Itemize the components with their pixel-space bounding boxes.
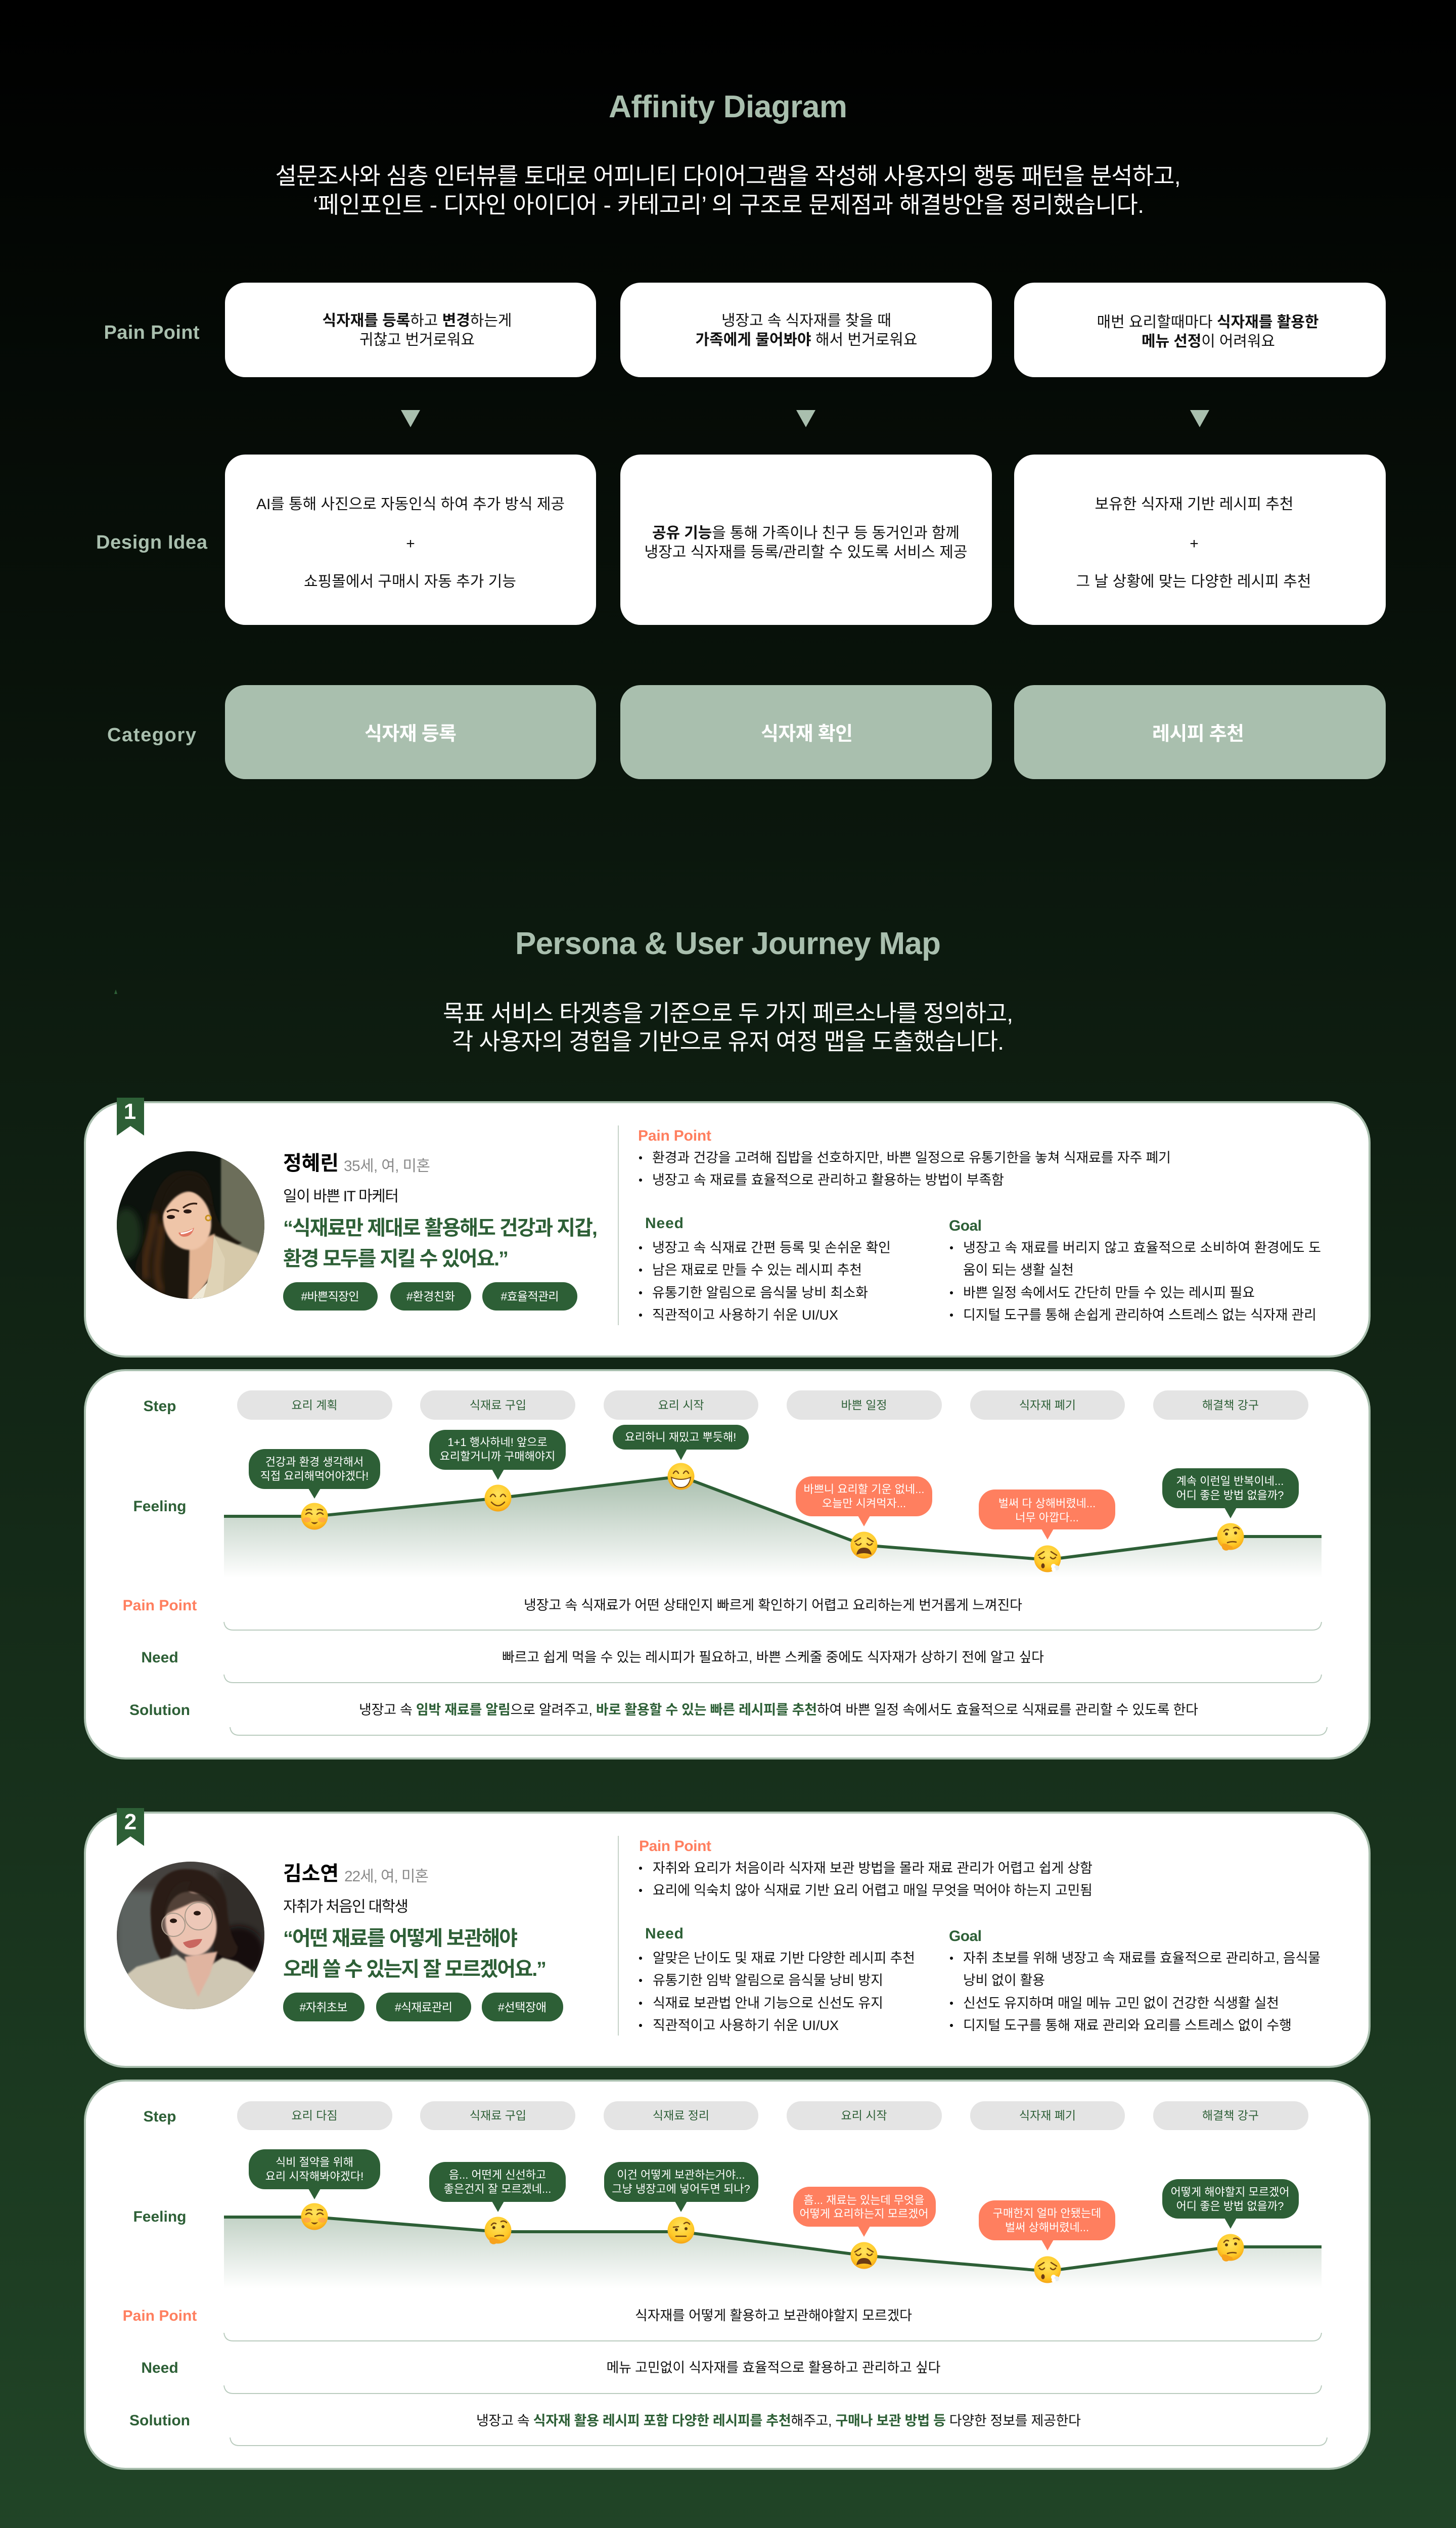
callout: step 4: 바쁘니 요리할 기운 없네... (803, 1483, 925, 1496)
callout: step 6 (1162, 2179, 1299, 2229)
callout: step 6: 계속 이런일 반복이네... (1176, 1475, 1284, 1487)
text: persona 2 name: 김소연 (283, 1863, 339, 1885)
callout: step 5: 너무 아깝다... (1015, 1511, 1079, 1524)
steps row: 식재료 구입 (470, 2109, 526, 2122)
row: pain point (224, 2308, 1322, 2341)
row label: Pain Point: Pain Point (104, 322, 200, 343)
text: persona 2 goals: 신선도 유지하며 매일 메뉴 고민 없이 건강한 식생활 실천 (963, 1996, 1279, 2011)
callout: step 1: 건강과 환경 생각해서 (265, 1456, 363, 1468)
text: persona 2 goals: 낭비 없이 활용 (963, 1973, 1045, 1988)
text: persona 2 needs: Need (645, 1925, 684, 1942)
chart: feeling curve 1 (224, 1476, 1322, 1578)
text: persona 1 needs: 직관적이고 사용하기 쉬운 UI/UX (652, 1307, 838, 1323)
design idea card 2 (620, 455, 992, 625)
text: persona 2 needs: 유통기한 임박 알림으로 음식물 낭비 방지 (653, 1973, 883, 1988)
category card 1 (225, 685, 596, 779)
text: persona 1 goals: Goal (949, 1217, 982, 1234)
text: persona 2 goals: 자취 초보를 위해 냉장고 속 재료를 효율적으로 관리하고, 음식물 (963, 1951, 1321, 1966)
row: solution (230, 1702, 1327, 1735)
icon: smiling emoji (484, 1484, 512, 1512)
category card 1: 식자재 등록 (365, 724, 457, 745)
icon: ribbon number 1 (117, 1098, 144, 1136)
labels: journey rows: Solution (129, 2412, 190, 2429)
design idea card 1: 쇼핑몰에서 구매시 자동 추가 기능 (304, 573, 516, 590)
callout: step 5: 구매한지 얼마 안됐는데 (993, 2207, 1101, 2220)
arrow: column 3 (1190, 410, 1209, 427)
text: persona 1 pain points (638, 1127, 1171, 1188)
pain point card 2: 냉장고 속 식자재를 찾을 때 (721, 312, 891, 329)
text: persona 1 quote: 환경 모두를 지킬 수 있어요.” (283, 1248, 509, 1270)
tag: 바쁜직장인 (283, 1282, 378, 1311)
text: persona 1 needs: Need (645, 1215, 684, 1232)
callout: step 2: 좋은건지 잘 모르겠네... (444, 2183, 551, 2195)
pain point card 1: 식자재를 등록하고 변경하는게 (323, 312, 512, 329)
panel: persona 2 (85, 1808, 1370, 2067)
panel: journey map 1 (85, 1370, 1370, 1758)
pain point card 2: 가족에게 물어봐야 해서 번거로워요 (696, 332, 917, 348)
steps row: 요리 다짐 (291, 2109, 338, 2122)
design idea card 1: + (406, 535, 415, 552)
text: persona 2 needs: 직관적이고 사용하기 쉬운 UI/UX (653, 2018, 839, 2033)
tag: 효율적관리 (482, 1282, 577, 1311)
steps row: 바쁜 일정 (841, 1398, 887, 1412)
labels: journey rows: Need (141, 2360, 178, 2376)
text: persona 2 goals: 디지털 도구를 통해 재료 관리와 요리를 스트레스 없이 수행 (963, 2018, 1292, 2033)
text block: persona intro: 각 사용자의 경험을 기반으로 유저 여정 맵을 도출했습니다. (452, 1028, 1004, 1055)
text: persona 2 name (283, 1863, 429, 1885)
heading: Persona and User Journey Map: Persona & User Journey Map (515, 926, 941, 961)
text: persona 1 needs: 유통기한 알림으로 음식물 낭비 최소화 (652, 1285, 868, 1300)
steps row: 식자재 폐기 (1019, 1398, 1076, 1412)
design idea card 3: 그 날 상황에 맞는 다양한 레시피 추천 (1076, 573, 1311, 590)
tag: 식재료관리: #식재료관리 (395, 2001, 452, 2014)
tag: 환경친화: #환경친화 (406, 1290, 455, 1303)
callout: step 3: 이건 어떻게 보관하는거야... (617, 2169, 745, 2181)
text: persona 1 name: 35세, 여, 미혼 (344, 1158, 430, 1175)
icon: relaxed emoji (301, 1503, 328, 1530)
icon: thinking emoji (1217, 2234, 1244, 2262)
callout: step 3 (604, 2162, 758, 2212)
labels: journey rows: Step (143, 1398, 176, 1415)
steps row: 해결책 강구 (1202, 1398, 1259, 1412)
row: pain point (224, 1598, 1322, 1630)
text: persona 2 needs (639, 1925, 915, 2033)
callout: step 4 (793, 2187, 936, 2237)
category card 3 (1014, 685, 1386, 779)
callout: step 5 (979, 1489, 1115, 1540)
text: persona 1 pain points: 환경과 건강을 고려해 집밥을 선호하지만, 바쁜 일정으로 유통기한을 놓쳐 식재료를 자주 폐기 (652, 1150, 1171, 1165)
icon: relaxed emoji (301, 2203, 328, 2230)
labels: journey rows: Need (141, 1649, 178, 1666)
icon: raised eyebrow emoji (667, 2217, 695, 2244)
text: persona 2 needs: 알맞은 난이도 및 재료 기반 다양한 레시피 추천 (653, 1951, 915, 1966)
text: persona 2 quote: 오래 쓸 수 있는지 잘 모르겠어요.” (283, 1958, 547, 1980)
tag: 자취초보: #자취초보 (299, 2001, 348, 2014)
callout: step 1: 식비 절약을 위해 (276, 2156, 353, 2169)
row: solution: 냉장고 속 식자재 활용 레시피 포함 다양한 레시피를 추천해주고, 구매나 보관 방법 등 다양한 정보를 제공한다 (476, 2413, 1081, 2428)
text: persona 2 name: 22세, 여, 미혼 (344, 1868, 429, 1885)
text: persona 1 name: 정혜린 (283, 1152, 339, 1175)
design idea card 3 (1014, 455, 1386, 625)
text: persona 1 role: 일이 바쁜 IT 마케터 (283, 1188, 399, 1205)
row: need (224, 1650, 1322, 1683)
text: persona 2 pain points: 요리에 익숙치 않아 식재료 기반 요리 어렵고 매일 무엇을 먹어야 하는지 고민됨 (653, 1883, 1093, 1898)
text: persona 2 goals (949, 1928, 1321, 2033)
labels: journey rows: Feeling (133, 2208, 187, 2225)
tag: 식재료관리 (376, 1993, 471, 2021)
callout: step 2: 음... 어떤게 신선하고 (449, 2169, 546, 2181)
design idea card 3: 보유한 식자재 기반 레시피 추천 (1095, 496, 1293, 513)
steps row: 식자재 폐기 (1019, 2109, 1076, 2122)
callout: step 2 (429, 2162, 566, 2212)
category card 3: 레시피 추천 (1152, 724, 1244, 745)
text: persona 1 goals: 디지털 도구를 통해 손쉽게 관리하여 스트레스 없는 식자재 관리 (963, 1307, 1316, 1323)
tag: 바쁜직장인: #바쁜직장인 (301, 1290, 359, 1303)
design idea card 3: + (1190, 535, 1199, 552)
labels: journey rows: Feeling (133, 1498, 187, 1515)
text: persona 2 pain points: 자취와 요리가 처음이라 식자재 보관 방법을 몰라 재료 관리가 어렵고 쉽게 상함 (653, 1861, 1093, 1876)
text: persona 2 goals: Goal (949, 1928, 982, 1945)
pain point card 3: 매번 요리할때마다 식자재를 활용한 (1097, 314, 1318, 331)
text: persona 2 role: 자취가 처음인 대학생 (283, 1899, 408, 1915)
callout: step 5: 벌써 다 상해버렸네... (998, 1497, 1096, 1510)
row: solution: 냉장고 속 임박 재료를 알림으로 알려주고, 바로 활용할 수 있는 빠른 레시피를 추천하여 바쁜 일정 속에서도 효율적으로 식재료를 관리할 수 있도록 한다 (359, 1702, 1198, 1718)
tag: 자취초보 (283, 1993, 365, 2021)
text block: affinity intro (275, 163, 1181, 218)
text: persona 1 name (283, 1152, 430, 1175)
design idea card 1 (225, 455, 596, 625)
arrow: column 2 (796, 410, 815, 427)
callout: step 5: 벌써 상해버렸네... (1005, 2221, 1089, 2234)
row: need: 빠르고 쉽게 먹을 수 있는 레시피가 필요하고, 바쁜 스케줄 중에도 식자재가 상하기 전에 알고 싶다 (502, 1650, 1044, 1665)
labels: journey rows: Pain Point (123, 2308, 197, 2324)
labels: journey rows: Solution (129, 1702, 190, 1719)
text block: affinity intro: ‘페인포인트 - 디자인 아이디어 - 카테고리’ 의 구조로 문제점과 해결방안을 정리했습니다. (313, 192, 1144, 218)
pain point card 1: 귀찮고 번거로워요 (359, 332, 475, 348)
panel: persona 1 (85, 1098, 1370, 1357)
icon: ribbon number 2: 2 (124, 1810, 136, 1834)
labels: journey rows (123, 1398, 197, 1719)
design idea card 2: 공유 기능을 통해 가족이나 친구 등 동거인과 함께 (652, 525, 960, 541)
steps row (237, 2101, 1308, 2130)
callout: step 2: 요리할거니까 구매해야지 (440, 1450, 555, 1463)
row: pain point: 냉장고 속 식재료가 어떤 상태인지 빠르게 확인하기 어렵고 요리하는게 번거롭게 느껴진다 (524, 1598, 1022, 1613)
callout: step 1 (249, 2149, 380, 2199)
icon: ribbon number 2 (117, 1808, 144, 1846)
steps row: 식재료 구입 (470, 1398, 526, 1412)
callout: step 1 (249, 1449, 380, 1499)
row: solution (230, 2413, 1327, 2446)
text: persona 1 needs: 남은 재료로 만들 수 있는 레시피 추천 (652, 1262, 862, 1278)
callout: step 3 (613, 1425, 749, 1460)
icon: exhaling emoji (1034, 1545, 1061, 1572)
callout: step 6: 어떻게 해야할지 모르겠어 (1171, 2186, 1289, 2198)
text: persona 1 needs: 냉장고 속 식재료 간편 등록 및 손쉬운 확인 (652, 1240, 891, 1255)
pain point card 1 (225, 283, 596, 377)
callout: step 3: 요리하니 재밌고 뿌듯해! (625, 1431, 736, 1443)
text: persona 2 quote: “어떤 재료를 어떻게 보관해야 (283, 1927, 518, 1950)
callout: step 2: 1+1 행사하네! 앞으로 (447, 1436, 548, 1449)
text: persona 1 goals (949, 1217, 1321, 1323)
text: persona 1 quote: “식재료만 제대로 활용해도 건강과 지갑, (283, 1217, 598, 1239)
tag: 선택장애: #선택장애 (498, 2001, 547, 2014)
design idea card 2: 냉장고 식자재를 등록/관리할 수 있도록 서비스 제공 (644, 544, 968, 561)
text block: affinity intro: 설문조사와 심층 인터뷰를 토대로 어피니티 다이어그램을 작성해 사용자의 행동 패턴을 분석하고, (275, 163, 1181, 189)
text: persona 1 goals: 바쁜 일정 속에서도 간단히 만들 수 있는 레시피 필요 (963, 1285, 1255, 1300)
row label: Design Idea: Design Idea (96, 532, 208, 553)
pain point card 2 (620, 283, 992, 377)
arrow: column 1 (401, 410, 420, 427)
text: persona 1 needs (639, 1215, 891, 1323)
text: persona 2 pain points (639, 1838, 1093, 1898)
panel: journey map 2 (85, 2081, 1370, 2469)
callout: step 4: 오늘만 시켜먹자... (822, 1497, 906, 1510)
text: persona 1 goals: 냉장고 속 재료를 버리지 않고 효율적으로 소비하여 환경에도 도 (963, 1240, 1321, 1255)
steps row: 해결책 강구 (1202, 2109, 1259, 2122)
tag: 선택장애 (482, 1993, 563, 2021)
text: persona 1 quote (283, 1217, 598, 1270)
icon: thinking emoji (484, 2217, 512, 2244)
chart: feeling curve 2 (224, 2217, 1322, 2288)
steps row: 요리 시작 (841, 2109, 887, 2122)
icon: grinning emoji (667, 1463, 695, 1489)
icon: weary emoji (850, 2242, 878, 2269)
callout: step 4: 어떻게 요리하는지 모르겠어 (799, 2207, 929, 2220)
steps row: 식재료 정리 (653, 2109, 709, 2122)
design idea card 1: AI를 통해 사진으로 자동인식 하여 추가 방식 제공 (256, 496, 565, 513)
callout: step 5 (979, 2200, 1115, 2250)
labels: journey rows (123, 2108, 197, 2429)
row label: Category: Category (107, 725, 196, 746)
tag: 효율적관리: #효율적관리 (500, 1290, 559, 1303)
icon: thinking emoji (1217, 1523, 1244, 1551)
heading: Affinity Diagram: Affinity Diagram (609, 89, 847, 124)
icon: weary emoji (850, 1532, 878, 1558)
category card 2: 식자재 확인 (761, 724, 853, 745)
text: persona 2 needs: 식재료 보관법 안내 기능으로 신선도 유지 (653, 1996, 883, 2011)
callout: step 4: 흠... 재료는 있는데 무엇을 (803, 2194, 925, 2206)
category card 2 (620, 685, 992, 779)
labels: journey rows: Step (143, 2108, 176, 2125)
text: persona 1 pain points: Pain Point (638, 1127, 711, 1144)
text: persona 2 pain points: Pain Point (639, 1838, 711, 1855)
callout: step 1: 요리 시작해봐야겠다! (265, 2170, 363, 2183)
row: pain point: 식자재를 어떻게 활용하고 보관해야할지 모르겠다 (635, 2308, 912, 2323)
text: persona 1 pain points: 냉장고 속 재료를 효율적으로 관리하고 활용하는 방법이 부족함 (652, 1172, 1004, 1188)
callout: step 6 (1162, 1468, 1299, 1518)
text block: persona intro: 목표 서비스 타겟층을 기준으로 두 가지 페르소나를 정의하고, (443, 1000, 1013, 1026)
labels: journey rows: Pain Point (123, 1597, 197, 1614)
text: persona 1 goals: 움이 되는 생활 실천 (963, 1262, 1074, 1278)
steps row: 요리 시작 (658, 1398, 704, 1412)
callout: step 6: 어디 좋은 방법 없을까? (1176, 2200, 1284, 2213)
row: need (224, 2360, 1322, 2394)
callout: step 3: 그냥 냉장고에 넣어두면 되나? (612, 2183, 750, 2195)
steps row (237, 1390, 1308, 1420)
text: persona 2 quote (283, 1927, 547, 1980)
icon: ribbon number 1: 1 (124, 1099, 136, 1124)
callout: step 6: 어디 좋은 방법 없을까? (1176, 1489, 1284, 1502)
row: need: 메뉴 고민없이 식자재를 효율적으로 활용하고 관리하고 싶다 (607, 2360, 941, 2375)
steps row: 요리 계획 (291, 1398, 338, 1412)
icon: exhaling emoji (1034, 2256, 1061, 2283)
text block: persona intro (443, 1000, 1013, 1055)
tag: 환경친화 (390, 1282, 471, 1311)
callout: step 2 (429, 1430, 566, 1480)
portrait: persona 2 (117, 1862, 268, 2012)
portrait: persona 1 (112, 1151, 268, 1304)
pain point card 3 (1014, 283, 1386, 377)
callout: step 4 (796, 1476, 932, 1526)
pain point card 3: 메뉴 선정이 어려워요 (1142, 333, 1275, 350)
callout: step 1: 직접 요리해먹어야겠다! (260, 1470, 369, 1482)
